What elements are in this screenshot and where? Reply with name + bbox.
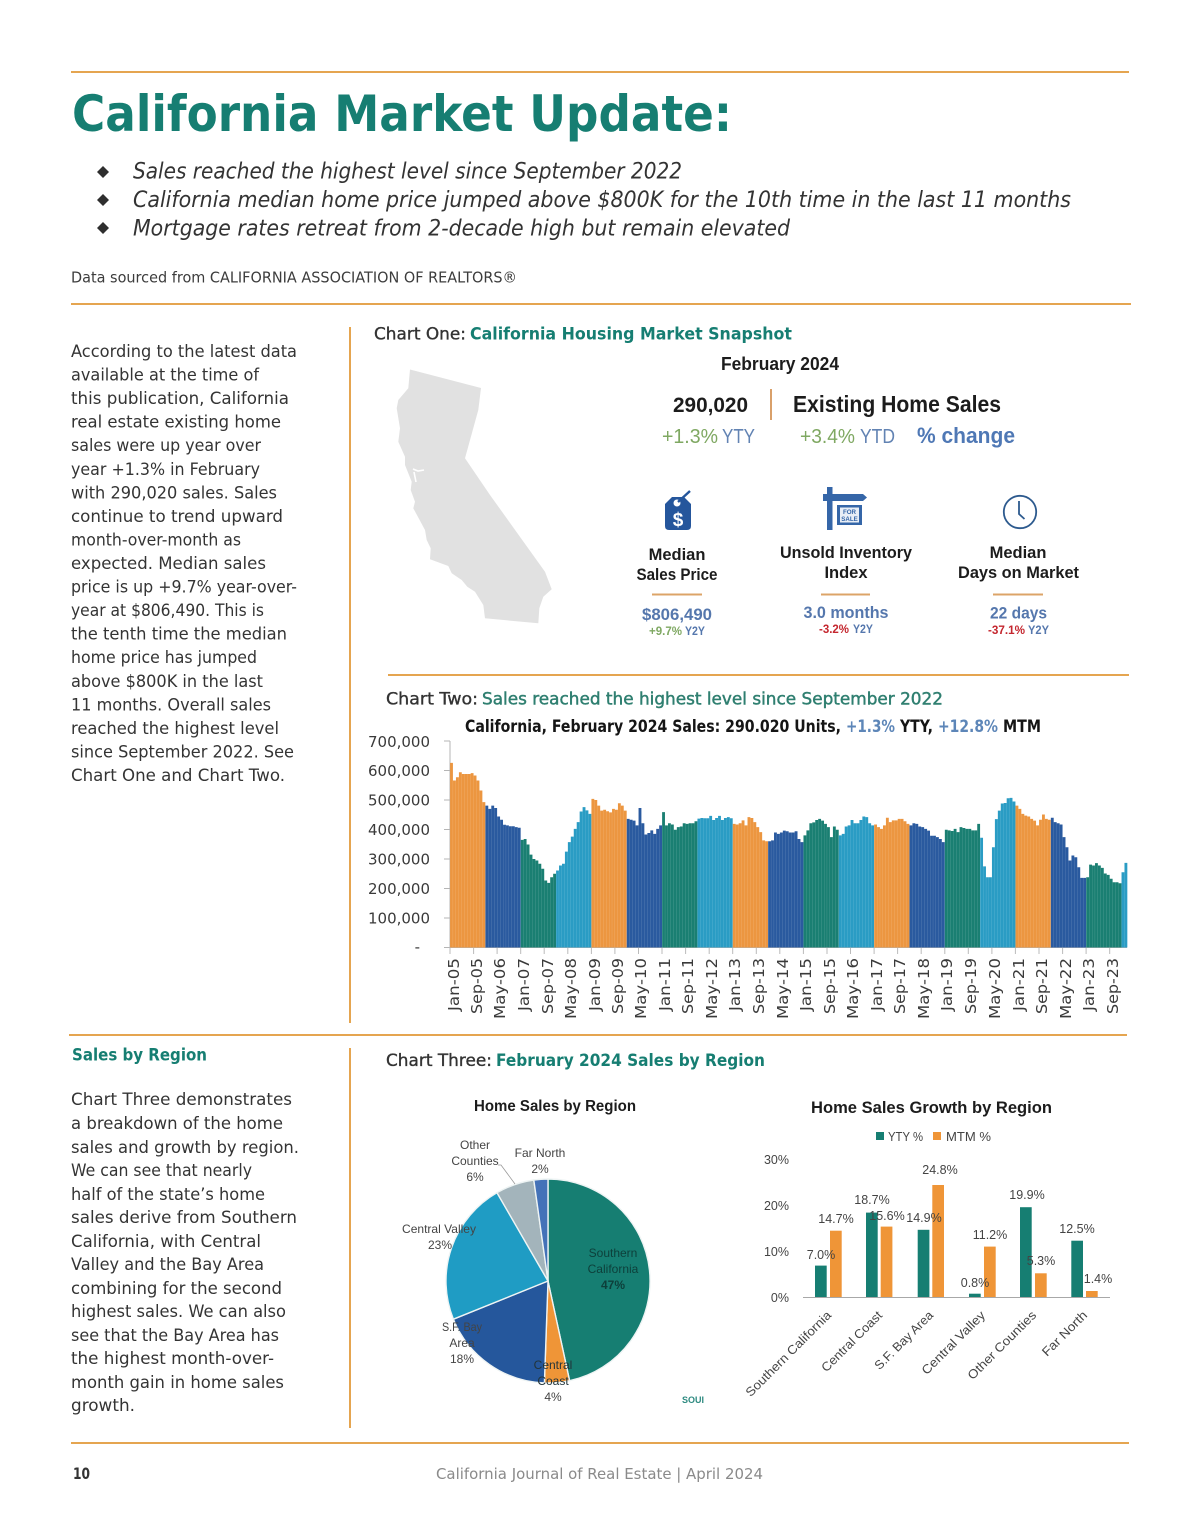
y axis labels: 300,000: [368, 850, 430, 868]
region labels: Central Valley: [919, 1308, 989, 1378]
bullet list: key takeaways: California median home price jumped above $800K for the 10th time in the last 11 months: [133, 187, 1071, 213]
text block: sales by region description: see that the Bay Area has: [71, 1326, 279, 1345]
pie labels: Counties: [451, 1154, 499, 1168]
x axis labels: May-10: [632, 958, 650, 1019]
icon: price tag: $: [673, 510, 684, 531]
stat: median days on market: 22 days: [990, 604, 1047, 622]
y axis labels: 200,000: [368, 880, 430, 898]
chart subtitle: YTY,: [899, 717, 933, 736]
region labels: Central Coast: [819, 1308, 886, 1375]
y axis labels: 400,000: [368, 821, 430, 839]
x axis labels: Sep-19: [962, 958, 980, 1014]
text block: sales by region description: combining for the second: [71, 1279, 282, 1298]
clipped source label: SOUI: [682, 1395, 704, 1405]
x axis labels: Sep-11: [679, 958, 697, 1014]
panel: chart one housing snapshot: [397, 354, 1079, 638]
footer: publication: California Journal of Real Estate | April 2024: [436, 1465, 763, 1483]
x axis labels: Jan-19: [938, 958, 956, 1012]
x axis labels: May-12: [703, 958, 721, 1019]
x axis labels: Jan-11: [656, 958, 674, 1012]
icon: for sale sign: FOR: [843, 509, 857, 516]
headline stat: existing home sales: % change: [917, 423, 1015, 448]
panel: chart one housing snapshot: -37.1%: [988, 625, 1025, 637]
panel: chart one housing snapshot: -3.2%: [819, 624, 849, 636]
x axis labels: [445, 958, 1122, 1019]
pie labels: 6%: [466, 1170, 484, 1184]
heading: chart one: California Housing Market Snapshot: [470, 324, 792, 344]
heading: sales by region: Sales by Region: [72, 1046, 207, 1064]
stat: median sales price: $806,490: [642, 605, 712, 624]
pie labels: Coast: [537, 1374, 569, 1388]
text block: market summary: year +1.3% in February: [71, 460, 260, 479]
data labels: 18.7%: [854, 1193, 890, 1207]
text block: market summary: this publication, California: [71, 389, 289, 408]
pie labels: Area: [449, 1336, 475, 1350]
x axis labels: May-14: [774, 958, 792, 1019]
icon: for sale sign: SALE: [841, 516, 858, 523]
x axis labels: Jan-13: [726, 958, 744, 1012]
data labels: 14.7%: [818, 1212, 854, 1226]
y axis labels: 10%: [764, 1245, 789, 1259]
x axis labels: Jan-17: [868, 958, 886, 1012]
pie labels: [402, 1138, 639, 1404]
x axis labels: May-18: [915, 958, 933, 1019]
x axis labels: Sep-21: [1033, 958, 1051, 1014]
headline stat: existing home sales: +1.3%: [662, 426, 718, 448]
heading: chart one: Chart One:: [374, 324, 466, 344]
text block: market summary: sales were up year over: [71, 436, 261, 455]
y axis labels: 0%: [771, 1291, 789, 1305]
y axis labels: [368, 733, 430, 956]
text block: market summary: expected. Median sales: [71, 554, 266, 573]
heading: chart three: Chart Three:: [386, 1051, 492, 1070]
panel: chart two monthly sales bar chart: [368, 717, 1127, 1019]
data labels: 14.9%: [906, 1211, 942, 1225]
text block: sales by region description: sales derive from Southern: [71, 1208, 297, 1227]
data labels: 7.0%: [807, 1248, 835, 1262]
data labels: 19.9%: [1009, 1188, 1045, 1202]
data labels: 11.2%: [973, 1228, 1007, 1242]
heading: chart three: [386, 1051, 765, 1070]
legend: MTM %: [946, 1130, 991, 1144]
y axis labels: 700,000: [368, 733, 430, 751]
stat: median sales price: Sales Price: [636, 566, 718, 584]
chart subtitle: MTM: [1003, 717, 1041, 736]
region labels: Far North: [1039, 1308, 1090, 1359]
chart subtitle: +1.3%: [846, 717, 895, 736]
stat: median days on market: Median: [990, 544, 1046, 562]
icon: price tag: [665, 491, 691, 531]
pie labels: Central: [534, 1358, 572, 1372]
pie labels: Far North: [515, 1146, 565, 1160]
headline stat: existing home sales: Existing Home Sales: [793, 391, 1001, 417]
stat: median days on market: [958, 544, 1079, 622]
region labels: S.F. Bay Area: [872, 1308, 936, 1373]
x axis labels: Jan-15: [797, 958, 815, 1012]
stat: unsold inventory index: [780, 544, 913, 622]
text block: market summary: 11 months. Overall sales: [71, 695, 271, 714]
x axis labels: Sep-17: [891, 958, 909, 1014]
x axis labels: Sep-13: [750, 958, 768, 1014]
pie slices: [446, 1179, 650, 1383]
stat: median sales price: [636, 546, 718, 624]
icon: clock: [1004, 496, 1036, 528]
text block: market summary: month-over-month as: [71, 530, 241, 549]
bullet list: key takeaways: Mortgage rates retreat from 2-decade high but remain elevated: [133, 216, 791, 242]
text block: market summary: home price has jumped: [71, 648, 257, 667]
text block: sales by region description: sales and growth by region.: [71, 1138, 299, 1157]
bullet list: key takeaways: [97, 158, 1071, 242]
date label: February 2024: [721, 354, 839, 374]
pie labels: Southern: [589, 1246, 637, 1260]
text block: market summary: since September 2022. See: [71, 742, 294, 761]
x axis labels: Jan-09: [586, 958, 604, 1012]
panel: chart one housing snapshot: Y2Y: [1028, 625, 1049, 637]
y axis labels: 500,000: [368, 792, 430, 810]
x axis labels: Jan-21: [1010, 958, 1028, 1012]
pie labels: S.F. Bay: [442, 1320, 482, 1334]
x axis labels: Sep-23: [1104, 958, 1122, 1014]
text block: market summary: above $800K in the last: [71, 672, 264, 691]
pie labels: 47%: [601, 1278, 625, 1292]
text block: sales by region description: Chart Three demonstrates: [71, 1090, 292, 1109]
text block: market summary: According to the latest data: [71, 342, 297, 361]
legend: [876, 1130, 991, 1144]
x axis labels: May-16: [844, 958, 862, 1019]
x axis labels: Sep-05: [468, 958, 486, 1014]
title: California Market Update:: [72, 85, 732, 143]
data labels: 24.8%: [922, 1163, 958, 1177]
text block: sales by region description: growth.: [71, 1396, 135, 1415]
data labels: [807, 1163, 1112, 1290]
x axis labels: Sep-09: [609, 958, 627, 1014]
text block: market summary: Chart One and Chart Two.: [71, 766, 285, 785]
text block: sales by region description: a breakdown of the home: [71, 1114, 283, 1133]
heading: chart three: February 2024 Sales by Region: [496, 1051, 765, 1070]
region labels: [743, 1308, 1090, 1399]
data source note: Data sourced from CALIFORNIA ASSOCIATION OF REALTORS®: [71, 268, 517, 286]
data labels: 1.4%: [1084, 1272, 1112, 1286]
text block: market summary: real estate existing home: [71, 413, 281, 432]
text block: market summary: with 290,020 sales. Sales: [71, 483, 277, 502]
y axis labels: -: [415, 938, 420, 956]
region labels: Southern California: [743, 1308, 834, 1399]
text block: sales by region description: month gain in home sales: [71, 1373, 284, 1392]
text block: market summary: continue to trend upward: [71, 507, 283, 526]
text block: sales by region description: Valley and the Bay Area: [71, 1255, 264, 1274]
x axis labels: Jan-07: [515, 958, 533, 1012]
text block: sales by region description: highest sales. We can also: [71, 1302, 286, 1321]
pie labels: 23%: [428, 1238, 452, 1252]
text block: market summary: reached the highest level: [71, 719, 279, 738]
text block: market summary: price is up +9.7% year-over-: [71, 578, 297, 596]
text block: market summary: the tenth time the median: [71, 625, 287, 644]
text block: sales by region description: half of the state’s home: [71, 1185, 265, 1204]
map: California silhouette: [397, 370, 552, 623]
MTM bars: [830, 1185, 1098, 1297]
headline stat: existing home sales: 290,020: [673, 394, 748, 417]
text block: sales by region description: We can see that nearly: [71, 1161, 252, 1180]
pie labels: 18%: [450, 1352, 474, 1366]
y axis labels: [764, 1153, 789, 1305]
bar chart title: Home Sales Growth by Region: [811, 1098, 1052, 1117]
pie labels: Central Valley: [402, 1222, 476, 1236]
pie labels: 4%: [544, 1390, 562, 1404]
y axis labels: 30%: [764, 1153, 789, 1167]
x axis labels: Jan-23: [1080, 958, 1098, 1012]
stat: unsold inventory index: Index: [824, 564, 868, 582]
data labels: 5.3%: [1027, 1254, 1055, 1268]
pie labels: Other: [460, 1138, 490, 1152]
pie chart title: Home Sales by Region: [474, 1098, 636, 1115]
data labels: 15.6%: [869, 1209, 905, 1223]
chart subtitle: +12.8%: [938, 717, 998, 736]
region labels: Other Counties: [965, 1308, 1039, 1382]
y axis labels: 100,000: [368, 910, 430, 928]
text block: sales by region description: the highest month-over-: [71, 1349, 274, 1368]
x axis labels: May-06: [491, 958, 509, 1019]
text block: sales by region description: [71, 1090, 299, 1415]
headline stat: existing home sales: YTD: [860, 426, 895, 448]
pie labels: California: [588, 1262, 639, 1276]
data labels: 12.5%: [1059, 1222, 1095, 1236]
stat: unsold inventory index: 3.0 months: [804, 603, 888, 622]
x axis labels: Jan-05: [445, 958, 463, 1012]
y axis labels: 600,000: [368, 762, 430, 780]
headline stat: existing home sales: [662, 389, 1015, 448]
stat: median days on market: Days on Market: [958, 564, 1079, 582]
panel: bar chart home sales growth by region: [743, 1098, 1112, 1399]
x axis labels: May-22: [1057, 958, 1075, 1019]
panel: pie chart home sales by region: [402, 1098, 704, 1405]
legend: YTY %: [888, 1130, 923, 1144]
footer: page number: 10: [73, 1464, 90, 1483]
y axis labels: 20%: [764, 1199, 789, 1213]
stat: unsold inventory index: Unsold Inventory: [780, 544, 913, 562]
panel: chart one housing snapshot: Y2Y: [853, 624, 873, 636]
text block: market summary: [71, 342, 297, 785]
bars: monthly sales grouped by year: [452, 763, 1126, 948]
text block: market summary: available at the time of: [71, 366, 260, 384]
panel: chart one housing snapshot: +9.7%: [649, 626, 682, 638]
bullet list: key takeaways: Sales reached the highest level since September 2022: [133, 158, 682, 184]
headline stat: existing home sales: +3.4%: [800, 426, 855, 448]
data labels: 0.8%: [961, 1276, 989, 1290]
x axis labels: Sep-07: [539, 958, 557, 1014]
pie labels: 2%: [531, 1162, 549, 1176]
chart subtitle: California, February 2024 Sales: 290.020 Units,: [465, 717, 841, 736]
x axis labels: May-20: [986, 958, 1004, 1019]
heading: chart two: Chart Two:: [386, 690, 478, 708]
icon: for sale sign: [823, 487, 867, 530]
x axis labels: May-08: [562, 958, 580, 1019]
heading: chart two: Sales reached the highest level since September 2022: [482, 690, 943, 708]
YTY bars: [815, 1207, 1083, 1297]
headline stat: existing home sales: YTY: [722, 426, 755, 448]
x axis labels: Sep-15: [821, 958, 839, 1014]
text block: market summary: year at $806,490. This is: [71, 601, 264, 620]
stat: median sales price: Median: [649, 546, 705, 564]
panel: chart one housing snapshot: Y2Y: [685, 626, 705, 638]
text block: sales by region description: California, with Central: [71, 1232, 261, 1251]
